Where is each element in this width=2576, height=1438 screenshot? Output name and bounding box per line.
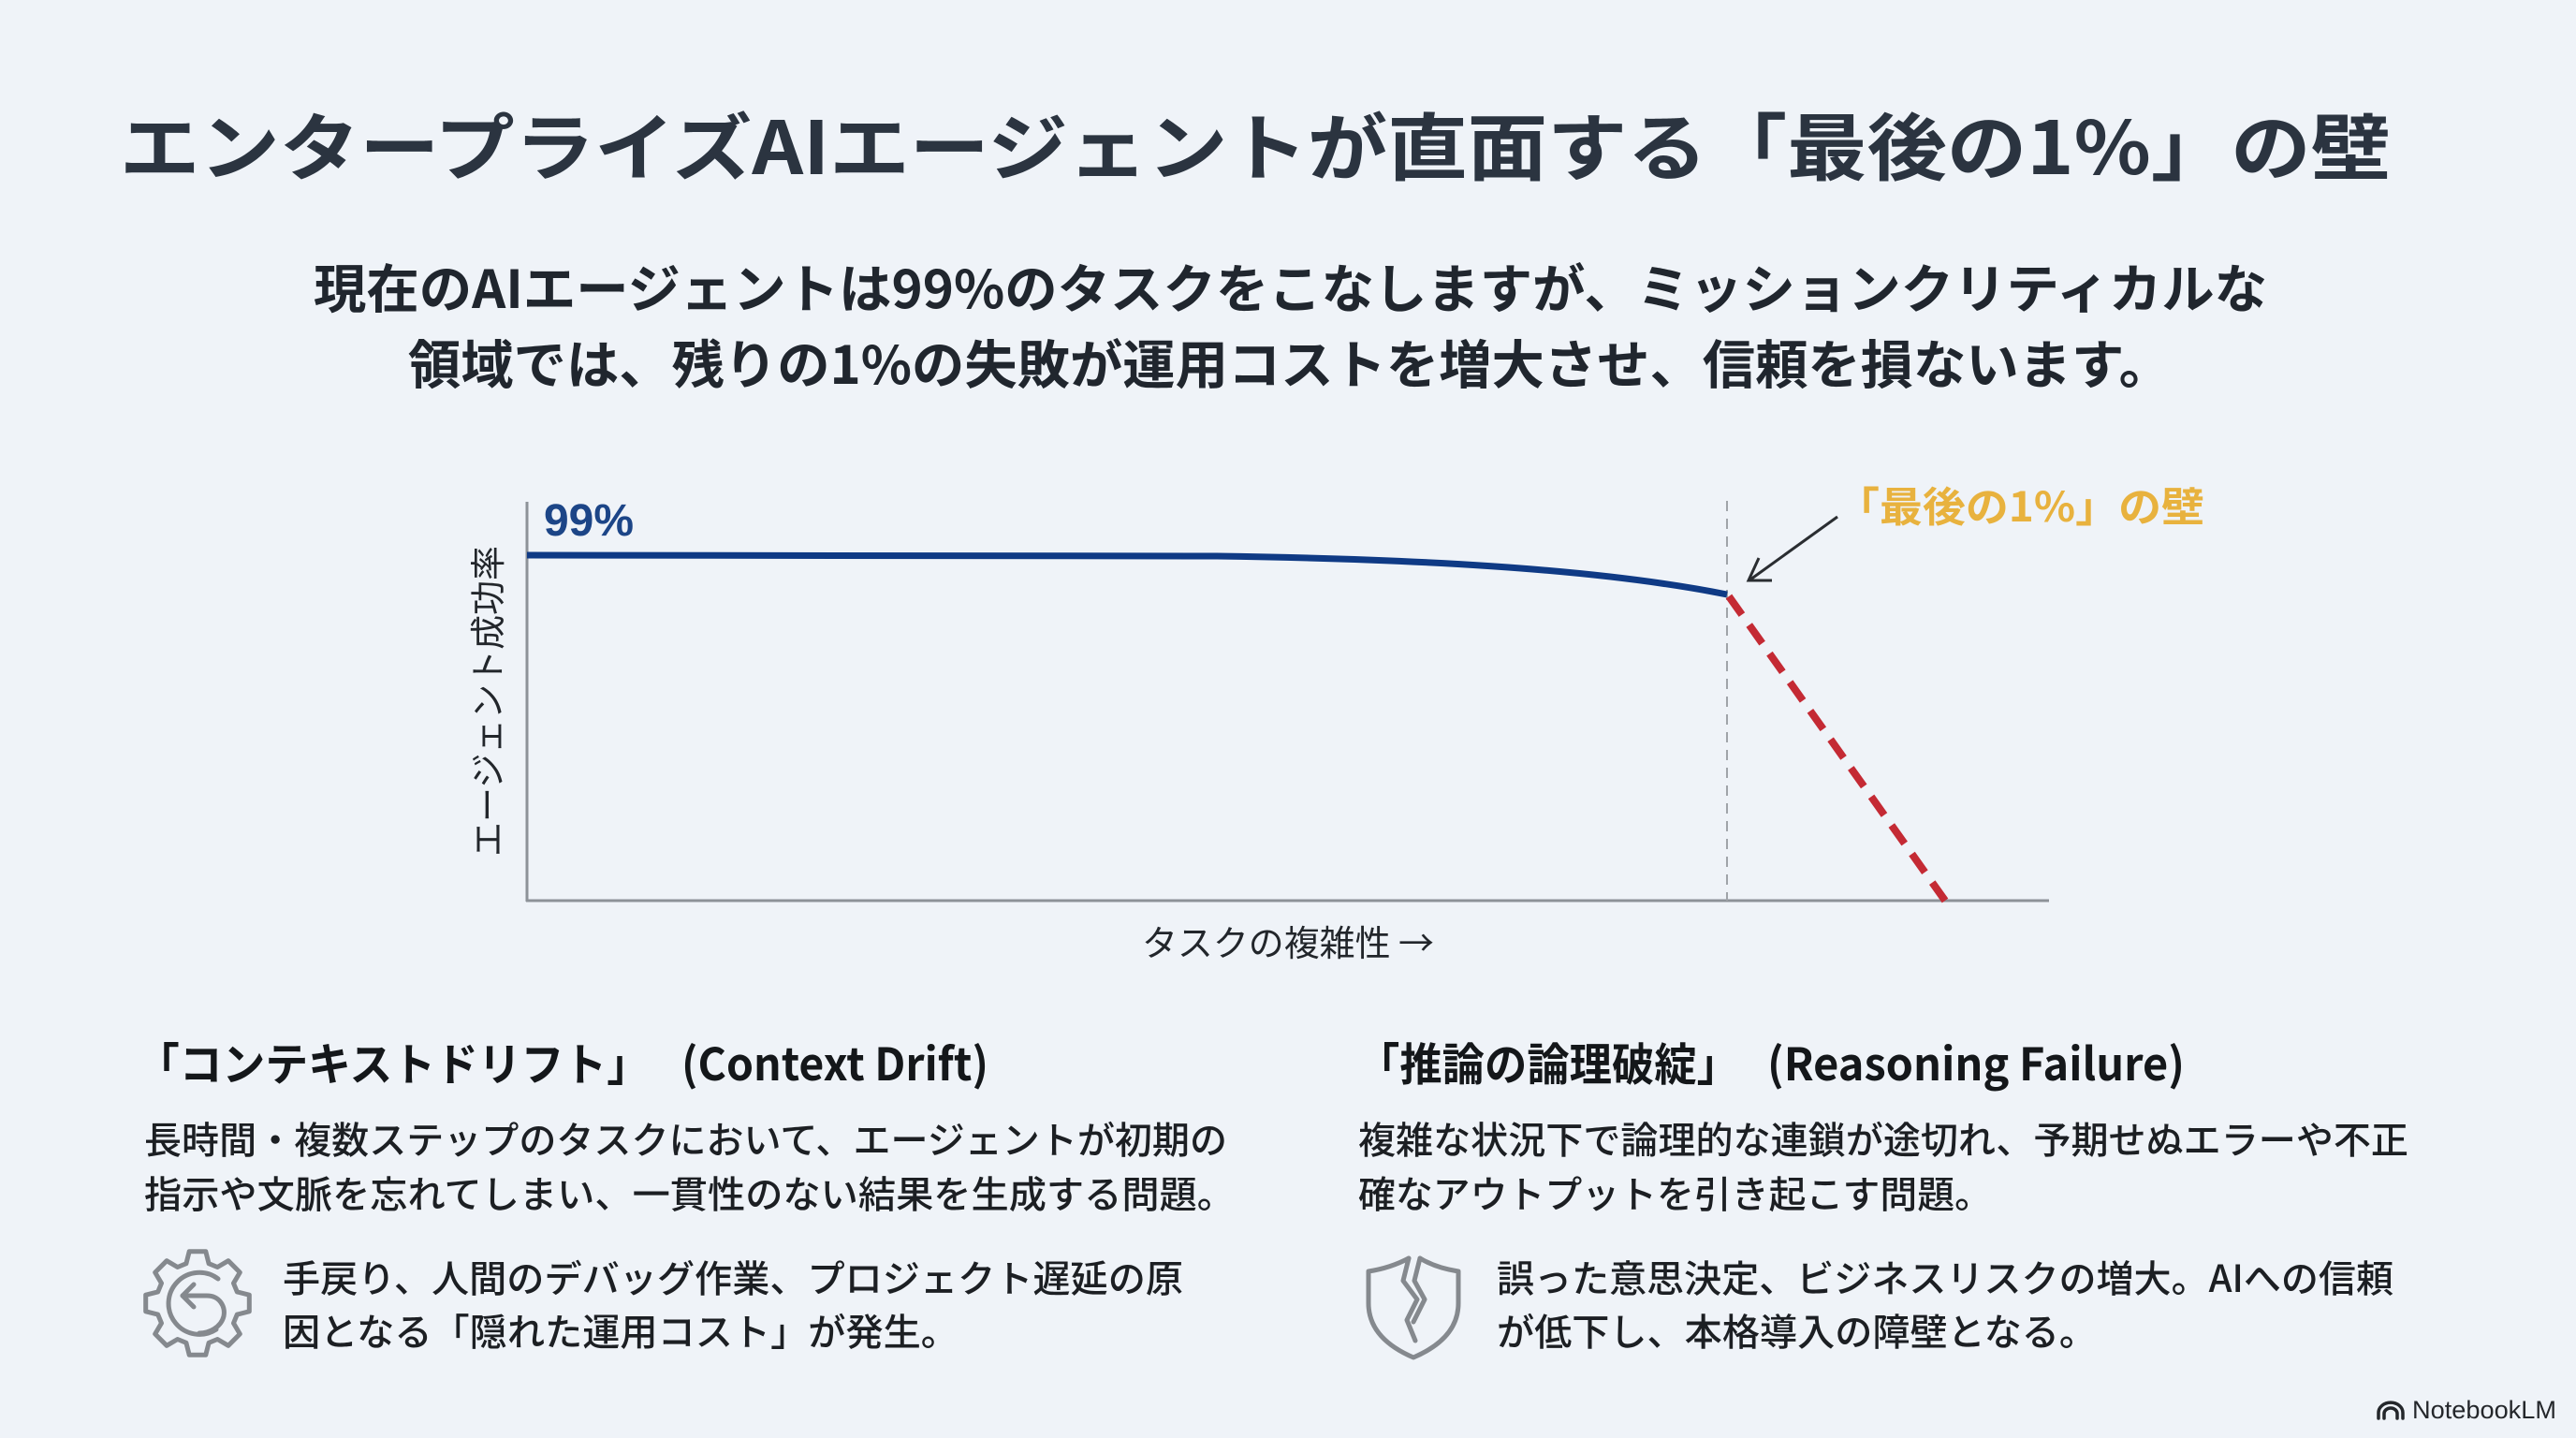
description: reasoning failure: 複雑な状況下で論理的な連鎖が途切れ、予期せぬエラーや不正 bbox=[1358, 1110, 2408, 1165]
heading: reasoning failure bbox=[1357, 1028, 2185, 1093]
subtitle: 領域では、残りの1%の失敗が運用コストを増大させ、信頼を損ないます。 bbox=[408, 324, 2172, 400]
failure drop line bbox=[1729, 596, 1945, 901]
icon: NotebookLM mark bbox=[2378, 1402, 2403, 1418]
description: context drift bbox=[144, 1110, 1235, 1219]
heading: reasoning failure: (Reasoning Failure) bbox=[1767, 1028, 2185, 1093]
description: reasoning failure: 確なアウトプットを引き起こす問題。 bbox=[1358, 1165, 1992, 1219]
y axis bbox=[526, 502, 528, 902]
chart: agent success rate versus task complexity bbox=[460, 474, 2204, 966]
title: エンタープライズAIエージェントが直面する「最後の1%」の壁 bbox=[120, 91, 2391, 196]
panel: context drift bbox=[137, 1028, 1235, 1357]
subtitle bbox=[314, 248, 2267, 400]
heading: context drift: (Context Drift) bbox=[681, 1028, 988, 1093]
impact text: context drift bbox=[283, 1249, 1183, 1357]
wall marker line bbox=[1726, 501, 1728, 901]
heading: reasoning failure: 「推論の論理破綻」 bbox=[1357, 1028, 1739, 1093]
impact text: reasoning failure bbox=[1497, 1249, 2393, 1357]
description: context drift: 長時間・複数ステップのタスクにおいて、エージェントが初期の bbox=[144, 1110, 1227, 1165]
impact text: context drift: 手戻り、人間のデバッグ作業、プロジェクト遅延の原 bbox=[283, 1249, 1183, 1303]
arrow to wall point bbox=[1749, 517, 1837, 580]
x axis bbox=[526, 899, 2049, 902]
icon: gear with return arrow bbox=[146, 1252, 249, 1355]
description: reasoning failure bbox=[1358, 1110, 2408, 1219]
x axis label: タスクの複雑性 → bbox=[1142, 915, 1434, 966]
impact text: reasoning failure: 誤った意思決定、ビジネスリスクの増大。AIへの信頼 bbox=[1497, 1249, 2393, 1303]
subtitle: 現在のAIエージェントは99%のタスクをこなしますが、ミッションクリティカルな bbox=[314, 248, 2267, 324]
success rate curve bbox=[527, 555, 1727, 594]
99% label: 99% bbox=[544, 496, 634, 546]
description: context drift: 指示や文脈を忘れてしまい、一貫性のない結果を生成する問題。 bbox=[144, 1165, 1235, 1219]
y axis label: エージェント成功率 bbox=[460, 546, 511, 857]
icon: cracked shield bbox=[1368, 1258, 1458, 1357]
impact text: context drift: 因となる「隠れた運用コスト」が発生。 bbox=[283, 1302, 959, 1357]
panel: reasoning failure bbox=[1357, 1028, 2408, 1357]
wall label: 「最後の1%」の壁 bbox=[1837, 474, 2204, 534]
watermark: NotebookLM: NotebookLM bbox=[2412, 1396, 2556, 1424]
impact text: reasoning failure: が低下し、本格導入の障壁となる。 bbox=[1497, 1302, 2097, 1357]
heading: context drift bbox=[137, 1028, 988, 1093]
heading: context drift: 「コンテキストドリフト」 bbox=[137, 1028, 650, 1093]
